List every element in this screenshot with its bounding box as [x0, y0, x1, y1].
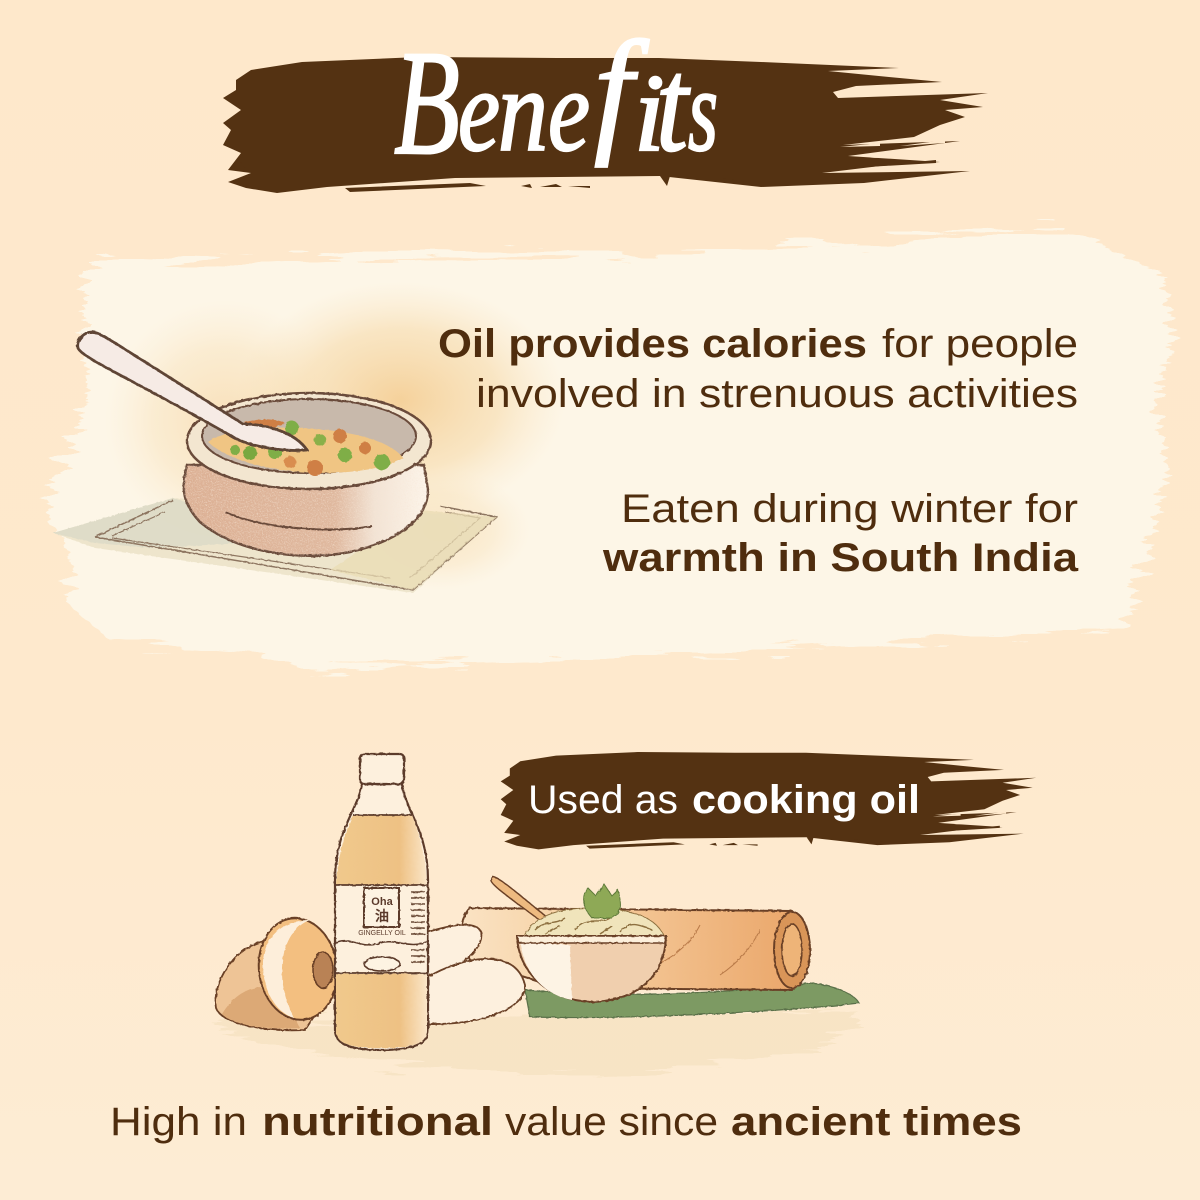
illustration: bottle and South Indian food: [212, 754, 859, 1073]
text: nutritional value: High in: [110, 1100, 247, 1144]
panel: cream brush background: [44, 226, 1172, 672]
text: calories: for people: [882, 322, 1078, 366]
text: nutritional value: value since: [505, 1100, 718, 1144]
panel: energy and warmth: [53, 282, 1079, 593]
title: B: [394, 20, 460, 186]
panel: cooking oil: [212, 752, 1036, 1073]
text: used as cooking oil: Used as: [528, 778, 678, 822]
title banner: [223, 13, 988, 193]
text: nutritional value: nutritional: [262, 1100, 493, 1144]
title: s: [688, 45, 718, 176]
bottle label text: Oha: [371, 896, 394, 908]
title: n: [498, 45, 548, 176]
text: warmth: warmth in South India: [602, 536, 1079, 580]
title: t: [656, 31, 690, 179]
title: e: [458, 45, 500, 176]
bottle label text: [358, 896, 406, 937]
illustration: clay pot with spoon: [53, 282, 565, 593]
vadas and idlis: [215, 913, 525, 1030]
text: winter: Eaten during winter for: [621, 487, 1078, 531]
dosa roll: [462, 908, 810, 990]
title: i: [634, 52, 665, 174]
bottle label text: 油: [375, 908, 389, 924]
place mat: [53, 498, 497, 593]
bowl of rice: [491, 877, 666, 1002]
pot body: [184, 393, 431, 556]
text: strenuous activities: involved in strenuous activities: [476, 372, 1078, 416]
cooking oil brush stroke: [501, 752, 1036, 849]
table wash: [212, 1010, 858, 1073]
text: calories: Oil provides calories: [438, 322, 867, 366]
watercolour glow behind pot: [105, 282, 565, 590]
title: e: [548, 45, 590, 176]
spoon: [78, 332, 307, 450]
bottle label text: GINGELLY OIL: [358, 930, 406, 937]
bottle: [335, 754, 428, 1050]
title: f: [594, 13, 650, 168]
text: nutritional value: ancient times: [731, 1100, 1022, 1144]
curry: [208, 427, 403, 473]
leaf: [525, 983, 859, 1018]
text: used as cooking oil: cooking oil: [692, 778, 920, 822]
title brush stroke: [223, 57, 988, 193]
